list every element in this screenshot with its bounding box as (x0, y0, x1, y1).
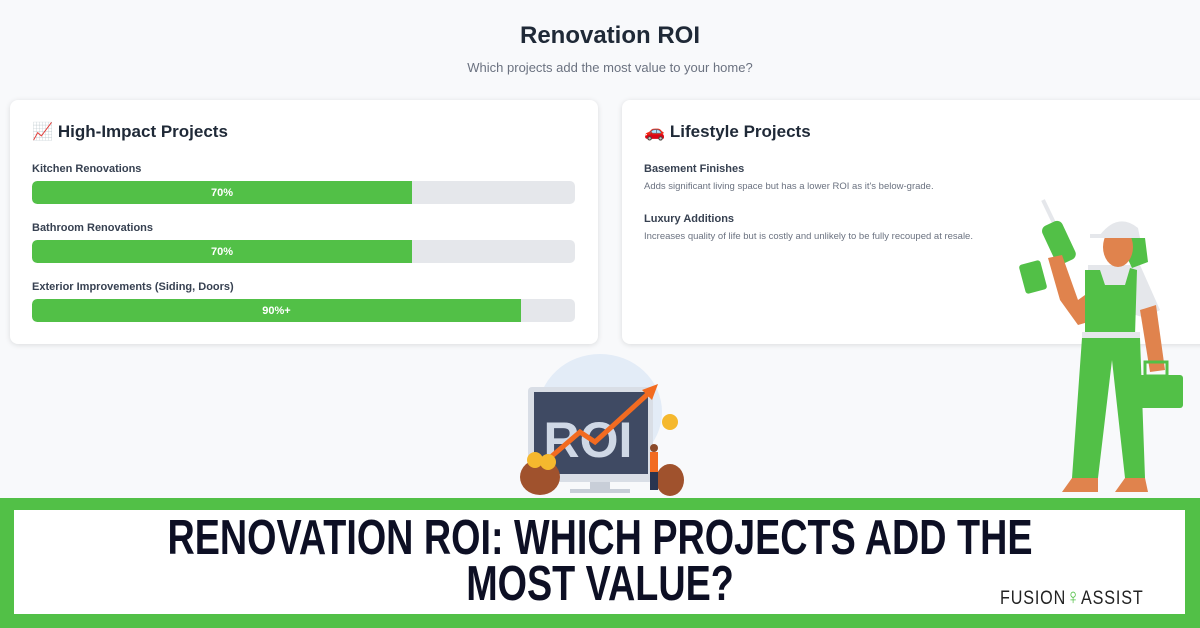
item: basement: Basement Finishes (644, 163, 744, 175)
label: exterior: Exterior Improvements (Siding, Doors) (32, 281, 234, 293)
item: luxury (644, 213, 973, 242)
headline banner (0, 498, 1200, 628)
bar: exterior 90%+ (32, 299, 575, 322)
illustration: ROI monitor: ROI (544, 412, 632, 468)
illustration: worker (1019, 199, 1183, 492)
panel: high-impact projects (10, 100, 598, 344)
heading: lifestyle: 🚗 Lifestyle Projects (644, 122, 811, 141)
label: kitchen: Kitchen Renovations (32, 163, 141, 175)
label: bathroom: Bathroom Renovations (32, 222, 153, 234)
item: basement (644, 163, 934, 192)
bar: kitchen 70%: 70% (211, 186, 233, 198)
item: luxury: Increases quality of life but is costly and unlikely to be fully recouped at resale. (644, 231, 973, 242)
title: Renovation ROI (520, 22, 700, 49)
headline text: RENOVATION ROI: WHICH PROJECTS ADD THE (167, 511, 1032, 565)
item: basement: Adds significant living space but has a lower ROI as it's below-grade. (644, 181, 934, 192)
bar: bathroom 70% (32, 240, 575, 263)
item: luxury: Luxury Additions (644, 213, 734, 225)
headline text: MOST VALUE? (466, 557, 734, 611)
subtitle: Which projects add the most value to your home? (467, 60, 753, 75)
illustration: ROI monitor (520, 354, 684, 496)
bar: bathroom 70%: 70% (211, 246, 233, 258)
bar: exterior 90%+: 90%+ (262, 304, 291, 316)
headline text (167, 511, 1032, 611)
heading: high-impact: 📈 High-Impact Projects (32, 122, 228, 141)
logo: fusion assist: FUSION♀ASSIST (1000, 584, 1144, 609)
panel: lifestyle projects (622, 100, 1200, 344)
bar: kitchen 70% (32, 181, 575, 204)
